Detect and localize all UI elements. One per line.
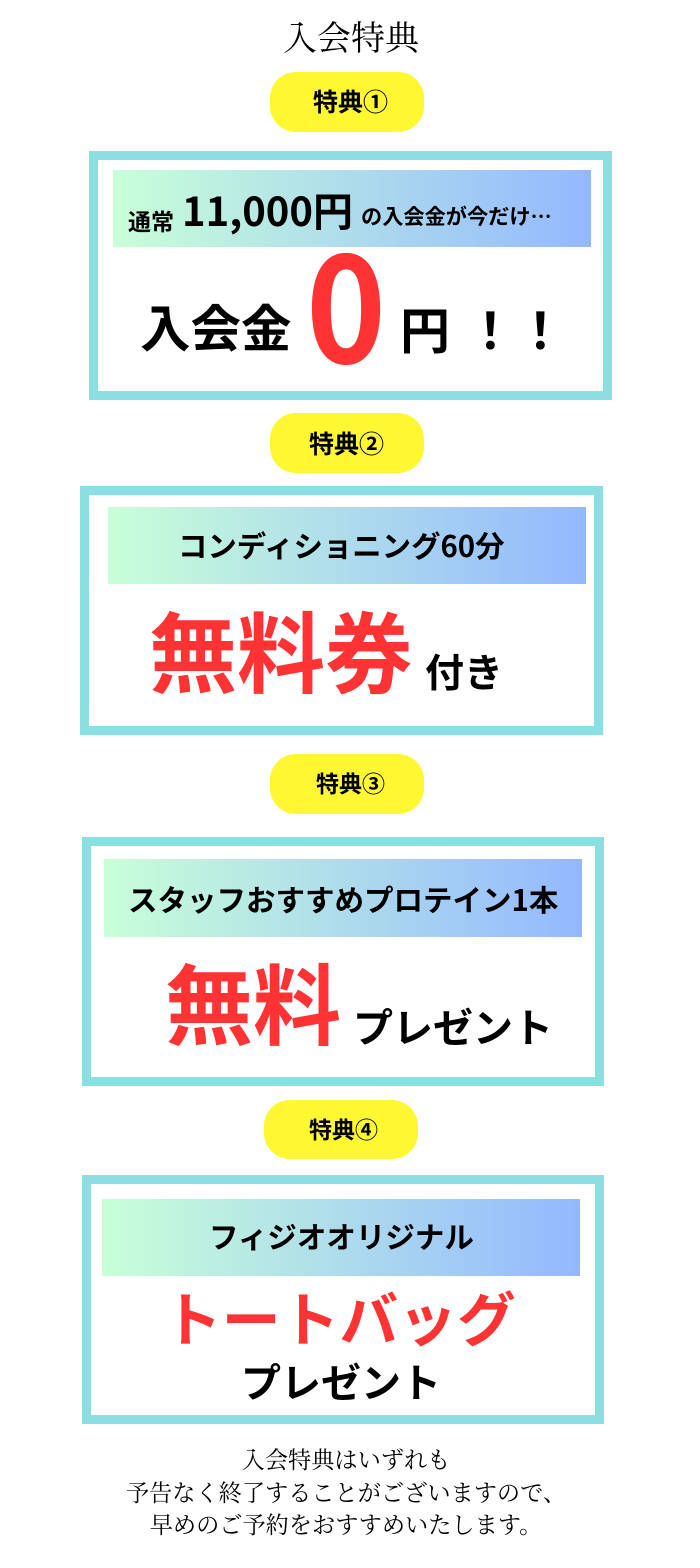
note xyxy=(126,1448,566,1539)
banner: original: フィジオオリジナル xyxy=(209,1215,474,1257)
text: 無料: 無料 xyxy=(165,937,341,1064)
note: 予告なく終了することがございますので、 xyxy=(126,1480,566,1506)
banner: conditioning: コンディショニング60分 xyxy=(178,524,505,566)
banner: original xyxy=(102,1199,580,1276)
badge: 特典2 xyxy=(270,413,424,473)
badge: 特典1: 特典① xyxy=(313,83,388,119)
text: 無料券: 無料券 xyxy=(149,585,413,712)
panel: 特典1 xyxy=(89,151,612,400)
panel: 特典4 xyxy=(82,1175,604,1424)
banner: regular fee xyxy=(113,170,591,247)
text: プレゼント: プレゼント xyxy=(241,1351,441,1409)
note: 早めのご予約をおすすめいたします。 xyxy=(150,1513,542,1539)
note: 入会特典はいずれも xyxy=(242,1448,450,1474)
title: 入会特典 xyxy=(283,21,419,58)
panel: 特典3 xyxy=(82,837,604,1086)
banner: protein xyxy=(104,859,582,937)
panel: 特典2 xyxy=(80,486,603,735)
badge: 特典2: 特典② xyxy=(309,425,384,461)
badge: 特典3 xyxy=(270,754,424,814)
figure: red 0: 0 xyxy=(306,195,386,406)
banner: regular fee: 通常 xyxy=(128,203,174,237)
badge: 特典4: 特典④ xyxy=(309,1111,378,1145)
banner: protein: スタッフおすすめプロテイン1本 xyxy=(128,878,558,920)
badge: 特典4 xyxy=(264,1100,418,1159)
text: プレゼント: プレゼント xyxy=(353,996,553,1054)
text: 付き: 付き xyxy=(425,643,503,699)
banner: regular fee: 11,000円 xyxy=(182,180,353,238)
text: 円！！: 円 ！！ xyxy=(400,292,565,364)
badge: 特典1 xyxy=(270,72,424,132)
banner: regular fee: の入会金が今だけ… xyxy=(361,200,552,231)
text: 入会金: 入会金 xyxy=(140,288,292,362)
text: トートバッグ: トートバッグ xyxy=(163,1273,516,1358)
badge: 特典3: 特典③ xyxy=(316,765,385,799)
banner: conditioning xyxy=(108,507,586,584)
